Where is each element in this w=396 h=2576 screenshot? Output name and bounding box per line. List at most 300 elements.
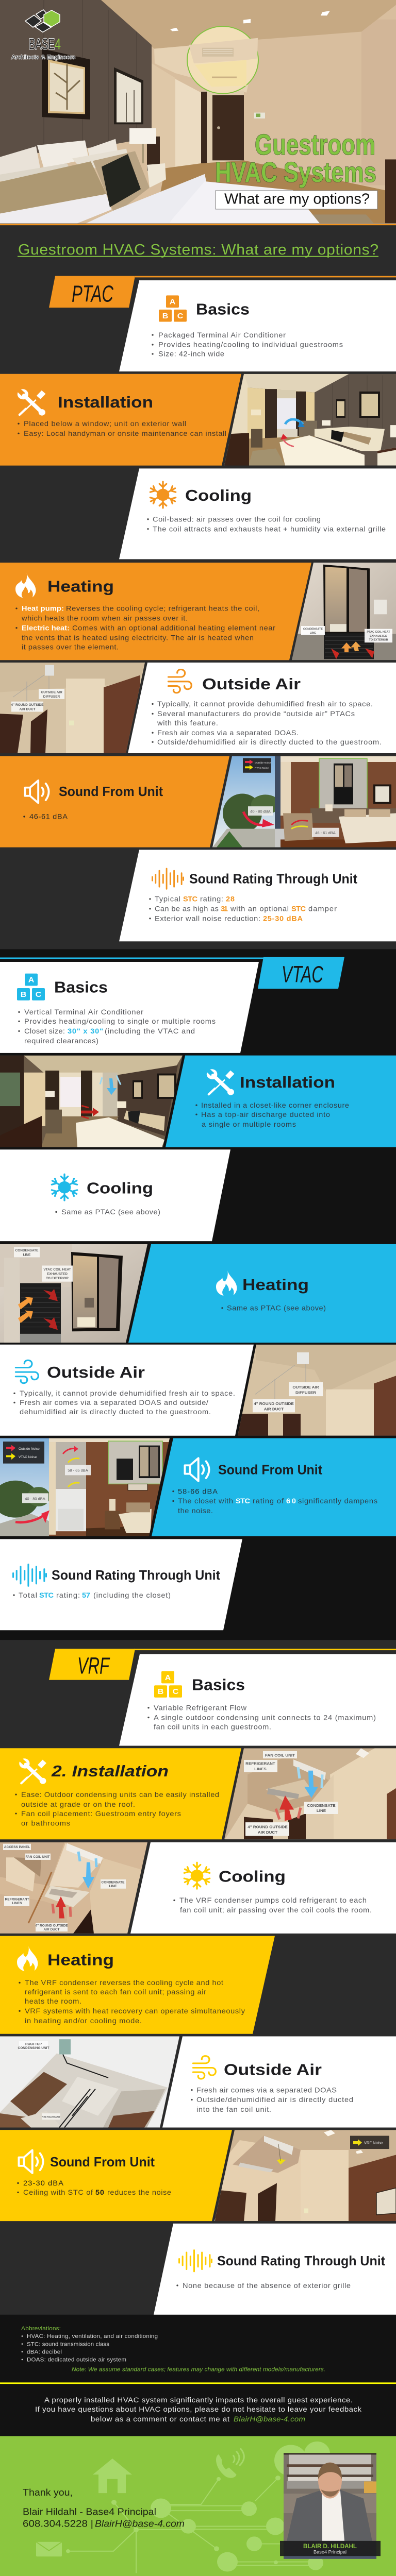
callout: coil heat <box>42 1265 73 1282</box>
heading: Installation <box>240 1074 335 1091</box>
callout: refrigerant: LINES <box>254 1767 267 1771</box>
callout: duct <box>11 702 43 712</box>
icon: snowflake <box>184 1862 210 1889</box>
icon: ABC blocks: A <box>28 976 34 985</box>
heading: Basics <box>54 978 108 996</box>
icon: snowflake <box>52 1174 77 1200</box>
bullet text: None because of the absence of exterior grille <box>183 2282 351 2290</box>
bullet text: in heating and/or cooling mode. <box>25 2017 142 2025</box>
name banner: Base4 Principal <box>314 2550 346 2555</box>
heading: Basics <box>192 1676 245 1693</box>
name banner <box>280 2541 381 2556</box>
bullet text <box>13 1591 171 1600</box>
photo: VRF fan coil <box>224 1748 396 1839</box>
callout: duct: AIR DUCT <box>20 708 36 711</box>
callout: access panel: ACCESS PANEL <box>4 1845 30 1849</box>
closing message: BlairH@base-4.com <box>234 2415 305 2424</box>
abbreviations block: HVAC: Heating, ventilation, and air conditioning <box>27 2333 158 2340</box>
panel: PTAC sound from unit <box>0 756 396 848</box>
bullet text: The coil attracts and exhausts heat + humidity via external grille <box>153 526 386 533</box>
callout: access panel <box>3 1844 31 1850</box>
heading: Outside Air <box>224 2061 322 2078</box>
logo: 4 <box>55 36 61 53</box>
panel: VTAC sound from unit <box>0 1438 396 1536</box>
bullet text: (including the closet) <box>93 1591 171 1600</box>
callout: unit noise <box>65 1465 91 1475</box>
bullet text: Provides heating/cooling to individual guestrooms <box>158 341 343 349</box>
icon: ABC blocks: C <box>36 990 41 999</box>
bullet text: rating of <box>253 1498 284 1505</box>
heading: Sound From Unit <box>59 784 163 799</box>
photo: VRF soffit <box>211 2130 396 2221</box>
callout: unit noise <box>312 828 339 837</box>
callout: refrigerant: REFRIGERANT <box>5 1898 29 1901</box>
panel: VRF basics <box>119 1654 396 1746</box>
bullet text: with an optional <box>230 905 289 913</box>
photo: VTAC room <box>0 1056 183 1147</box>
bullet text: Size: 42-inch wide <box>158 350 224 359</box>
bullet text: Same as PTAC (see above) <box>227 1304 326 1312</box>
bullet text: Easy: Local handyman or onsite maintenance can install <box>24 430 226 438</box>
abbreviations block: DOAS: dedicated outside air system <box>27 2357 126 2363</box>
bullet text <box>18 420 226 438</box>
callout: condensate line: CONDENSATE <box>303 628 323 631</box>
callout: condensate: CONDENSATE <box>102 1881 124 1884</box>
callout: refrigerant: LINES <box>12 1902 22 1905</box>
icon: ABC blocks: A <box>170 298 175 306</box>
photo: VTAC noise section <box>0 1438 170 1536</box>
logo: BASE <box>29 36 55 53</box>
VRF tab <box>49 1649 135 1680</box>
air grille highlight circle <box>187 26 258 94</box>
icon: ABC blocks: B <box>158 1688 163 1696</box>
bullet text: Outside/dehumidified air is directly ducted to the guestroom. <box>157 738 382 747</box>
bullet text: reduces the noise <box>107 2189 171 2197</box>
orange rule <box>135 276 396 277</box>
bullet text <box>152 331 343 359</box>
bullet text: 57 <box>82 1591 90 1600</box>
closing message: A properly installed HVAC system significantly impacts the overall guest experience. <box>44 2396 353 2404</box>
icon: speaker <box>25 781 49 803</box>
note: Note: We assume standard cases; features may change with different models/manufacturers. <box>72 2366 325 2372</box>
callout: condensate <box>14 1247 40 1257</box>
bullet text: Installed in a closet-like corner enclosure <box>201 1101 349 1110</box>
photo: VRF ceiling diagram <box>0 1842 150 1934</box>
callout: refrigerant <box>42 2113 60 2120</box>
callout: fan coil <box>25 1854 51 1860</box>
bullet text: STC <box>236 1498 250 1505</box>
bullet text: into the fan coil unit. <box>196 2106 271 2114</box>
callout: exterior noise: 40 - 80 dBA <box>25 1497 45 1501</box>
main heading: Guestroom HVAC Systems: What are my options? <box>18 242 378 258</box>
callout: coil heat: EXHAUSTED <box>370 635 387 638</box>
PTAC tab <box>49 276 135 308</box>
panel: PTAC installation <box>0 374 396 466</box>
legend: VRF Noise <box>364 2141 383 2145</box>
bullet text: VRF systems with heat recovery can operate simultaneously <box>25 2007 245 2015</box>
heading: Sound Rating Through Unit <box>189 871 357 886</box>
logo <box>11 10 75 60</box>
closing message: below as a comment or contact me at <box>91 2415 229 2424</box>
heading: Installation <box>58 394 153 411</box>
yellow rule <box>134 1649 396 1650</box>
callout: coil heat: TO EXTERIOR <box>369 638 388 641</box>
bullet text: Total <box>19 1591 37 1600</box>
bullet text: Fresh air comes via a separated DOAS and outside/ <box>20 1399 208 1407</box>
heading: Cooling <box>185 487 252 504</box>
callout: coil heat: TO EXTERIOR <box>46 1277 69 1280</box>
callout: coil heat: PTAC COIL HEAT <box>367 631 390 634</box>
contact text: BlairH@base-4.com <box>95 2518 185 2529</box>
heading: Sound From Unit <box>218 1462 322 1477</box>
bullet text: Outside/dehumidified air is directly ducted <box>196 2096 353 2104</box>
callout: fan coil: FAN COIL UNIT <box>25 1855 50 1859</box>
bullet text: The VRF condenser pumps cold refrigerant to each <box>179 1897 367 1905</box>
closing message <box>35 2396 362 2424</box>
bullet text: dehumidified air is directly ducted to the guestroom. <box>20 1408 211 1416</box>
bullet text: Several manufacturers do provide “outside air” PTACs <box>157 710 355 718</box>
section: PTAC <box>0 276 396 941</box>
bullet text: Placed below a window; unit on exterior wall <box>24 420 186 428</box>
bullet text <box>191 2087 353 2114</box>
bullet text: Provides heating/cooling to single or multiple rooms <box>24 1018 216 1026</box>
bullet text <box>173 1897 372 1914</box>
section: VRF <box>0 1649 396 2315</box>
callout: fan coil: FAN COIL UNIT <box>265 1753 295 1757</box>
icon: ABC blocks: C <box>173 1688 178 1696</box>
bullet text: 25-30 dBA <box>263 915 303 923</box>
bullet text: fan coil units in each guestroom. <box>154 1723 271 1731</box>
panel: VRF cooling <box>0 1842 396 1934</box>
legend: PTAC Noise <box>255 767 269 770</box>
callout: diffuser <box>39 689 64 699</box>
callout: refrigerant <box>244 1760 277 1772</box>
bullet text: rating: <box>200 895 223 904</box>
bullet text: Electric heat: <box>22 624 70 632</box>
hero: bedroom photo with title <box>0 0 396 223</box>
abbreviations block: STC: sound transmission class <box>27 2342 109 2347</box>
icon: speaker <box>19 2150 43 2173</box>
callout: fan coil <box>263 1751 297 1758</box>
bullet text: required clearances) <box>24 1037 98 1045</box>
icon: sound wave <box>152 869 184 889</box>
bullet text: STC <box>183 895 197 904</box>
panel: VRF heating <box>0 1936 275 2034</box>
icon: snowflake <box>150 482 176 508</box>
VTAC tab <box>258 957 344 989</box>
callout: coil heat <box>365 629 392 642</box>
name banner: BLAIR D. HILDAHL <box>303 2543 357 2550</box>
bullet text: Can be as high as <box>155 905 219 913</box>
icon: wind <box>168 670 191 693</box>
bullet text <box>19 1979 245 2025</box>
bullet text: A single outdoor condensing unit connects to 24 (maximum) <box>154 1714 376 1722</box>
contact text: 608.304.5228 | <box>23 2518 93 2529</box>
bullet text: Comes with an optional additional heating element near <box>72 624 275 632</box>
legend <box>3 1442 44 1464</box>
bullet text: a single or multiple rooms <box>202 1121 296 1129</box>
callout: exterior noise <box>22 1493 48 1503</box>
heading: Sound Rating Through Unit <box>217 2253 385 2268</box>
bullet text: or bathrooms <box>21 1820 70 1828</box>
bullet text: refrigerant is sent to each fan coil unit; passing air <box>25 1988 206 1996</box>
bullet text: Same as PTAC (see above) <box>61 1208 160 1216</box>
bullet text: Fan coil placement: Guestroom entry foyers <box>21 1810 181 1818</box>
bullet text: The VRF condenser reverses the cooling cycle and hot <box>25 1979 223 1987</box>
heading: Heating <box>47 1951 114 1969</box>
callout: condensate: LINE <box>23 1253 30 1257</box>
heading: Sound Rating Through Unit <box>52 1568 220 1583</box>
panel: VTAC sound rating <box>0 1539 242 1630</box>
panel: VTAC heating <box>0 1244 396 1343</box>
callout: coil heat: EXHAUSTED <box>47 1273 68 1276</box>
callout: condensate: CONDENSATE <box>15 1249 38 1252</box>
bullet text: 46-61 dBA <box>29 813 68 821</box>
bullet text: the noise. <box>178 1507 213 1515</box>
icon: sound wave <box>13 1564 46 1586</box>
callout: coil heat: VTAC COIL HEAT <box>43 1268 71 1272</box>
heading: Outside Air <box>47 1364 145 1381</box>
icon: ABC blocks: A <box>165 1673 171 1682</box>
panel: VTAC outside air <box>0 1345 396 1436</box>
hero title <box>215 128 376 188</box>
bullet text <box>172 1488 377 1515</box>
bullet text <box>15 1791 219 1828</box>
bullet text: 58-66 dBA <box>178 1488 218 1496</box>
bullet text: Packaged Terminal Air Conditioner <box>158 331 286 340</box>
bullet text: 60 <box>286 1498 296 1505</box>
icon: flame <box>216 1270 237 1296</box>
bullet text: Closet size: <box>24 1027 65 1036</box>
panel: PTAC sound rating <box>119 850 396 941</box>
photo: VRF building cutaway <box>0 2036 180 2127</box>
VTAC tab: VTAC <box>282 961 323 987</box>
photo: VTAC corridor ceiling <box>237 1345 396 1436</box>
bullet text: STC <box>39 1591 54 1600</box>
heading: Heating <box>47 578 114 596</box>
callout: duct: AIR DUCT <box>44 1928 60 1931</box>
bullet text: it passes over the element. <box>22 643 119 651</box>
heading: 2. Installation <box>51 1762 169 1780</box>
callout: unit noise: 58 - 65 dBA <box>68 1468 88 1473</box>
contact text <box>23 2487 185 2529</box>
callout: duct: 4" ROUND OUTSIDE <box>254 1401 294 1406</box>
icon: ABC blocks: B <box>21 990 26 999</box>
callout: refrigerant <box>4 1896 29 1906</box>
bullet text: Coil-based: air passes over the coil for cooling <box>153 516 321 523</box>
abbreviations block: dBA: decibel <box>27 2349 62 2355</box>
bullet text <box>18 1008 216 1045</box>
callout: condensate <box>304 1802 338 1814</box>
callout: duct: 4" ROUND OUTSIDE <box>36 1924 68 1928</box>
bullet text <box>152 700 382 747</box>
icon: ABC blocks <box>17 974 45 1001</box>
icon: wrench <box>207 1069 234 1095</box>
panel: PTAC outside air <box>0 663 396 753</box>
icon: ABC blocks <box>159 295 187 322</box>
bullet text: 30" x 30" <box>68 1027 103 1036</box>
icon: wind <box>193 2056 216 2079</box>
icon: ABC blocks: B <box>162 312 168 320</box>
hero photo <box>0 0 396 223</box>
callout: diffuser <box>289 1382 323 1396</box>
abbreviations block <box>21 2325 158 2363</box>
icon: wrench <box>18 389 45 416</box>
icon: envelope <box>36 2542 62 2556</box>
portrait <box>284 2453 376 2559</box>
decorative network <box>66 2442 330 2573</box>
heading: Sound From Unit <box>50 2155 155 2170</box>
contact text: Blair Hildahl - Base4 Principal <box>23 2506 156 2518</box>
bullet text <box>147 1704 376 1731</box>
abbreviations block: Abbreviations: <box>21 2325 61 2332</box>
bullet text: Fresh air comes via a separated DOAS. <box>157 729 299 737</box>
bullet text: (including the VTAC and <box>105 1027 195 1036</box>
photo: PTAC corridor ceiling <box>0 663 147 753</box>
heading: Cooling <box>219 1868 286 1885</box>
bullet text: 50 <box>95 2189 104 2197</box>
bullet text: rating: <box>56 1591 80 1600</box>
icon: speaker <box>185 1458 209 1481</box>
icon: wind <box>15 1360 38 1383</box>
icon: flame <box>17 1946 38 1971</box>
bullet text <box>13 1389 235 1416</box>
bullet text: STC <box>291 905 306 913</box>
icon: flame <box>15 573 36 598</box>
callout: condensate line: LINE <box>310 632 317 635</box>
bullet text: Reverses the cooling cycle; refrigerant heats the coil, <box>66 605 259 613</box>
closing message: If you have questions about HVAC options, please do not hesitate to leave your feedback <box>35 2405 362 2414</box>
heading: Outside Air <box>202 675 301 693</box>
icon: ABC blocks <box>154 1671 182 1698</box>
section: VTAC <box>0 957 396 1630</box>
callout: diffuser: OUTSIDE AIR <box>41 691 62 694</box>
bullet text: Ease: Outdoor condensing units can be easily installed <box>21 1791 219 1799</box>
logo: Architects & Engineers <box>11 54 75 60</box>
callout: condensate line <box>301 626 325 635</box>
panel: PTAC basics <box>119 280 396 371</box>
heading: Basics <box>196 300 250 318</box>
PTAC tab: PTAC <box>72 281 113 307</box>
bullet text: 31 <box>221 905 228 913</box>
callout: duct: AIR DUCT <box>264 1407 284 1411</box>
bullet text: Typically, it cannot provide dehumidified fresh air to space. <box>157 700 373 708</box>
photo: VTAC grille <box>0 1244 150 1343</box>
bullet text: Typically, it cannot provide dehumidified fresh air to space. <box>20 1389 235 1398</box>
bullet text: Has a top-air discharge ducted into <box>201 1111 330 1119</box>
bullet text: Ceiling with STC of <box>23 2189 93 2197</box>
bullet text <box>15 605 275 651</box>
contact text: Thank you, <box>23 2487 73 2498</box>
panel: PTAC cooling <box>119 468 396 559</box>
callout: duct: AIR DUCT <box>258 1830 277 1835</box>
bullet text: Typical <box>155 895 180 904</box>
callout: duct: 4" ROUND OUTSIDE <box>248 1825 288 1829</box>
bullet text: the vents that is heated using electricity. The air is heated when <box>22 634 254 642</box>
heading: Cooling <box>87 1179 153 1197</box>
bullet text <box>17 2179 171 2197</box>
bullet text: with this feature. <box>157 719 218 727</box>
callout: diffuser: DIFFUSER <box>43 695 60 699</box>
legend: Outside Noise <box>19 1447 40 1451</box>
callout: exterior noise: 40 - 80 dBA <box>250 809 271 814</box>
panel: PTAC heating <box>0 563 396 660</box>
callout: unit noise: 46 - 61 dBA <box>315 831 336 835</box>
icon: phone <box>217 2448 244 2478</box>
bullet text: The closet with <box>178 1498 233 1505</box>
bullet text: Vertical Terminal Air Conditioner <box>24 1008 143 1016</box>
callout: condensate: CONDENSATE <box>307 1803 336 1808</box>
VRF tab: VRF <box>77 1653 110 1679</box>
legend <box>243 758 271 773</box>
callout: diffuser: DIFFUSER <box>295 1391 316 1395</box>
icon: sound wave <box>179 2250 211 2272</box>
callout: condensate <box>101 1879 126 1889</box>
photo: PTAC room <box>222 374 396 466</box>
callout: duct <box>253 1399 295 1412</box>
panel: VRF outside air <box>0 2036 396 2127</box>
legend <box>350 2136 389 2149</box>
yellow divider <box>0 2382 396 2384</box>
callout: diffuser: OUTSIDE AIR <box>292 1385 319 1389</box>
panel: VTAC installation <box>0 1056 396 1147</box>
bullet text <box>149 895 337 923</box>
hero subtitle box: What are my options? <box>224 191 370 207</box>
callout: duct: 4" ROUND OUTSIDE <box>11 703 43 707</box>
photo: PTAC noise section <box>211 756 396 848</box>
panel: VRF sound rating <box>154 2224 396 2315</box>
bullet text <box>147 516 386 533</box>
legend: VTAC Noise <box>19 1455 37 1459</box>
bullet text: outside at grade or on the roof. <box>21 1801 135 1809</box>
bullet text: significantly dampens <box>298 1498 377 1505</box>
portrait card <box>280 2453 381 2559</box>
bullet text: 28 <box>226 895 235 904</box>
callout: duct <box>245 1822 289 1836</box>
heading: Heating <box>242 1276 309 1294</box>
icon: house <box>93 2459 132 2493</box>
panel: VRF sound from unit <box>0 2130 396 2221</box>
bullet text: 23-30 dBA <box>23 2179 64 2188</box>
panel: VTAC cooling <box>0 1149 230 1241</box>
callout: exterior noise <box>248 806 273 816</box>
callout: rooftop unit: ROOFTOP <box>25 2043 42 2046</box>
photo: PTAC grille <box>289 563 396 660</box>
panel: VRF installation <box>0 1748 396 1839</box>
callout: condensate: LINE <box>109 1885 117 1888</box>
callout: condensate: LINE <box>317 1808 326 1813</box>
bullet text: Exterior wall noise reduction: <box>155 915 260 923</box>
panel: VTAC basics <box>0 962 259 1053</box>
callout: refrigerant: REFRIGERANT <box>245 1761 275 1766</box>
bullet text: Fresh air comes via a separated DOAS <box>196 2087 337 2094</box>
bullet text: fan coil unit; air passing over the coil cools the room. <box>180 1906 372 1914</box>
bullet text: which heats the room when air passes over it. <box>21 615 188 622</box>
icon: ABC blocks: C <box>177 312 183 320</box>
legend: Outside Noise <box>255 761 271 765</box>
callout: refrigerant: REFRIGERANT <box>42 2116 60 2119</box>
bullet text: Variable Refrigerant Flow <box>154 1704 247 1712</box>
callout: duct <box>36 1923 68 1931</box>
callout: rooftop unit <box>18 2041 50 2050</box>
contact panel <box>23 2442 381 2573</box>
bullet text: Heat pump: <box>22 605 64 613</box>
callout: rooftop unit: CONDENSING UNIT <box>18 2046 50 2050</box>
blue rule <box>0 957 263 959</box>
bullet text: heats the room. <box>25 1997 81 2006</box>
bullet text: damper <box>308 905 337 913</box>
bullet text <box>195 1101 349 1129</box>
